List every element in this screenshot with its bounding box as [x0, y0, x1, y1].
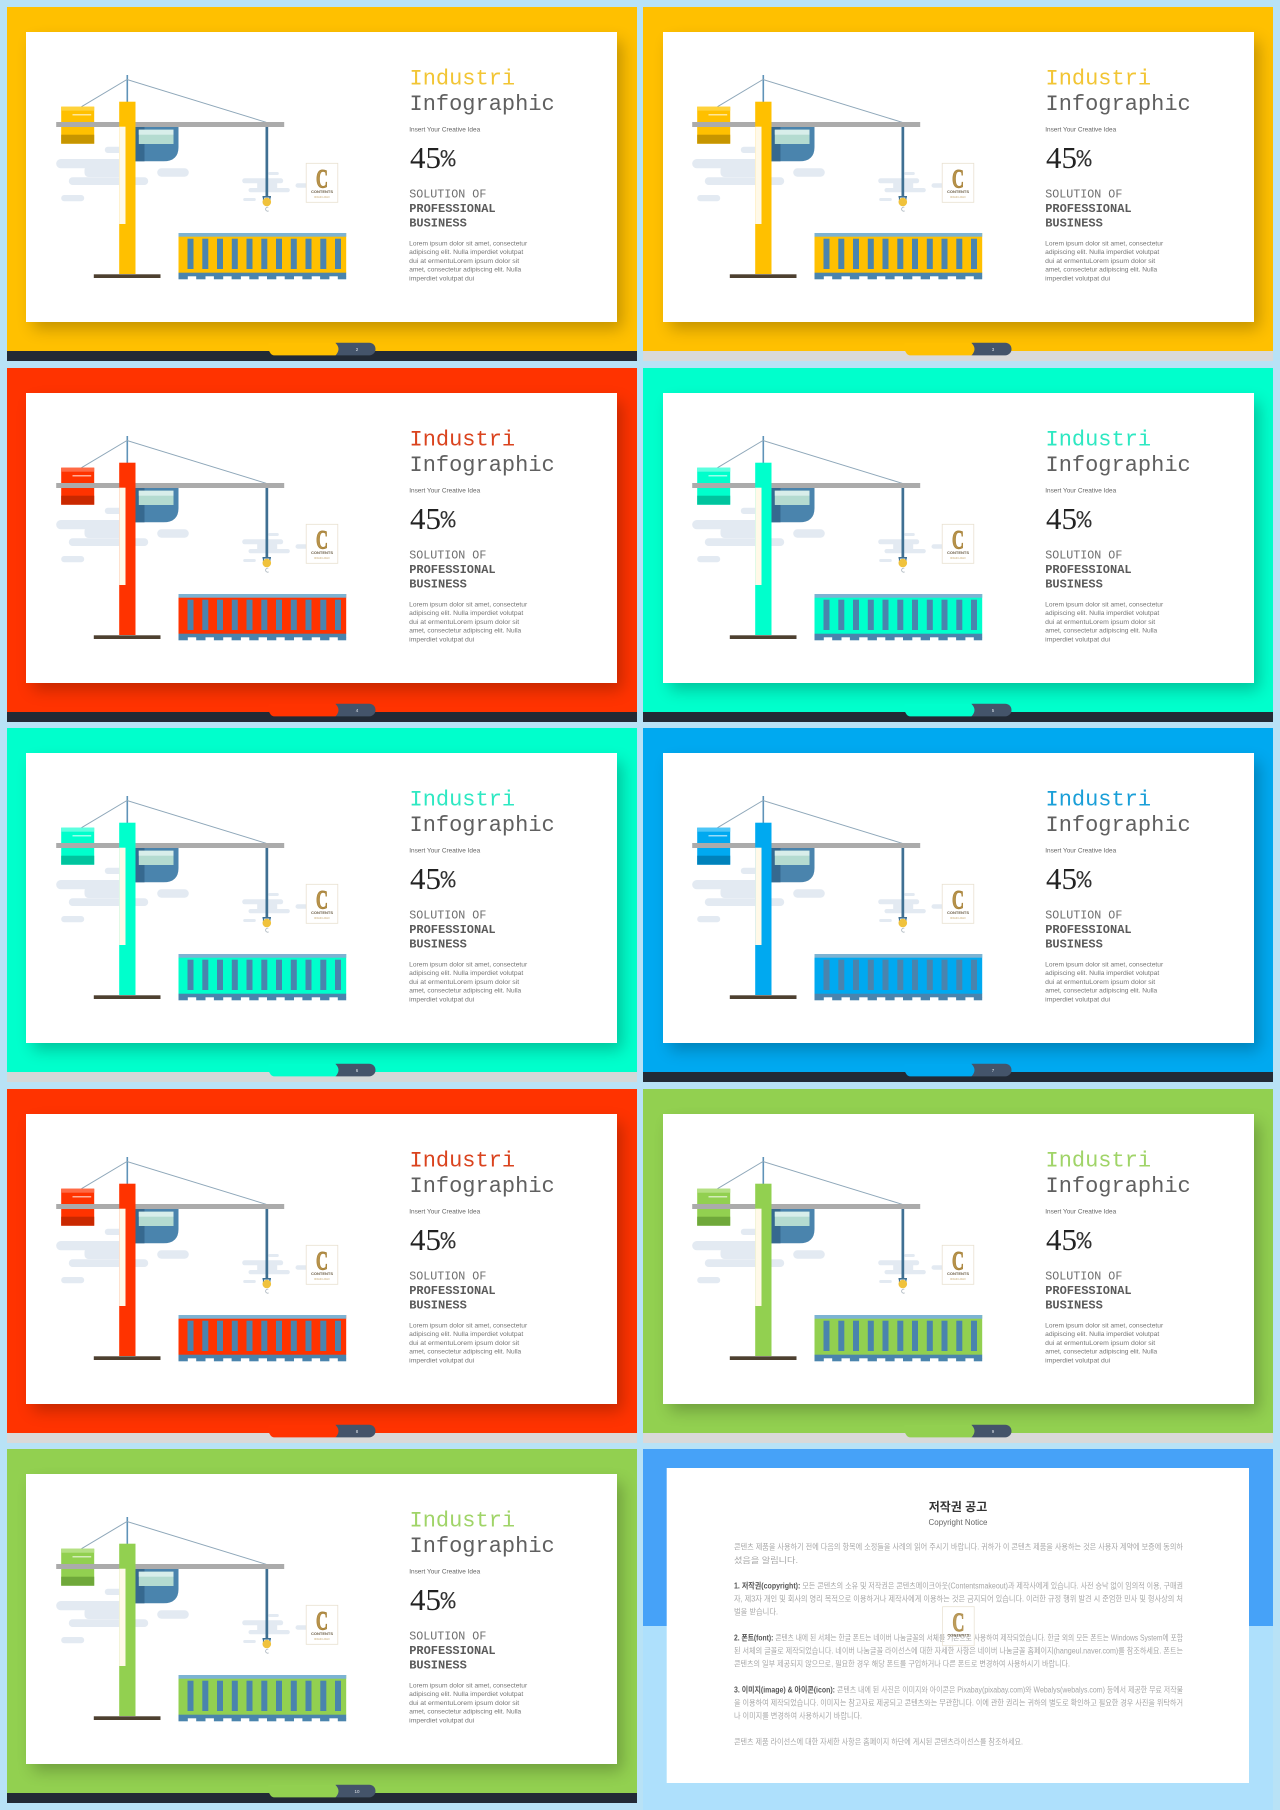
shipping container: [814, 954, 982, 1000]
logo watermark: [306, 1605, 337, 1644]
blue header band: [643, 1449, 1273, 1626]
body text: amet, consectetur adipiscing elit. Nulla: [409, 627, 521, 634]
notice section 1: 1. 저작권(copyright): 모든 콘텐츠의 소유 및 저작권은 콘텐츠메이크아웃(Contentsmakeout)과 제작사에게 있습니다. 사전 승낙 없이 임의적 이용, 구매권: [734, 1581, 1183, 1591]
notice section 3: 을 이용하여 제작되었습니다. 이미지는 참고자료 제공되고 콘텐츠와는 무관합니다. 이에 관한 권리는 귀하의 별도로 확인하고 필요한 경우 사진을 위탁하거: [734, 1697, 1183, 1707]
heading: PROFESSIONAL: [409, 562, 495, 576]
body text: Lorem ipsum dolor sit amet, consectetur: [409, 240, 527, 248]
subtitle: Insert Your Creative Idea: [1045, 1208, 1117, 1215]
title: Industri: [409, 1508, 515, 1533]
body text: [409, 962, 527, 1004]
subtitle: Insert Your Creative Idea: [409, 1568, 480, 1576]
clouds: [692, 1228, 948, 1283]
heading: BUSINESS: [1045, 217, 1103, 231]
body text: amet, consectetur adipiscing elit. Nulla: [409, 988, 521, 994]
heading: SOLUTION OF: [409, 1630, 486, 1644]
title: Infographic: [1046, 452, 1191, 478]
title: Infographic: [1046, 1174, 1191, 1198]
footer bar: [6, 1432, 636, 1442]
clouds: [56, 868, 312, 922]
heading: [409, 1269, 495, 1312]
footer bar: [643, 712, 1273, 722]
heading: SOLUTION OF: [409, 548, 486, 562]
logo watermark: C: [952, 164, 964, 194]
body text: [1045, 601, 1164, 643]
crane illustration: [692, 1156, 920, 1360]
heading: SOLUTION OF: [409, 188, 486, 202]
statistic 45%: 45: [410, 1222, 440, 1256]
heading: PROFESSIONAL: [409, 923, 495, 937]
logo watermark: CONTENTS: [310, 910, 333, 915]
heading: PROFESSIONAL: [409, 202, 495, 216]
logo watermark: C: [316, 1246, 328, 1275]
white card: [662, 32, 1254, 322]
white card: [26, 1114, 617, 1404]
body text: Lorem ipsum dolor sit amet, consectetur: [1045, 1322, 1164, 1329]
white card: [26, 392, 617, 682]
title: Industri: [1046, 427, 1151, 452]
heading: BUSINESS: [409, 1298, 466, 1312]
logo watermark: [942, 524, 974, 563]
heading: [1045, 188, 1132, 231]
logo watermark: CONTENTS: [947, 1270, 969, 1276]
notice background: [643, 1449, 1273, 1810]
body text: dui at ermentuLorem ipsum dolor sit: [409, 1340, 519, 1346]
footer bar: [643, 1072, 1273, 1082]
crane illustration: [56, 1517, 284, 1720]
statistic 45%: [410, 140, 456, 175]
body text: amet, consectetur adipiscing elit. Nulla: [409, 1348, 521, 1355]
statistic 45%: 45: [410, 500, 440, 536]
statistic 45%: %: [1076, 866, 1092, 896]
logo watermark: ROAD LOGO: [314, 917, 329, 920]
white card: [662, 392, 1254, 682]
statistic 45%: [410, 861, 456, 896]
logo watermark: ROAD LOGO: [950, 1278, 966, 1280]
body text: amet, consectetur adipiscing elit. Nulla: [1045, 627, 1158, 634]
body text: amet, consectetur adipiscing elit. Nulla: [1045, 266, 1158, 274]
logo watermark: CONTENTS: [947, 910, 969, 915]
heading: BUSINESS: [409, 577, 466, 591]
body text: imperdiet volutpat dui: [1045, 276, 1111, 282]
panel: slide 8 red: [6, 1088, 636, 1442]
logo watermark: [942, 1245, 974, 1284]
crane illustration: [692, 75, 920, 278]
clouds: [56, 507, 312, 562]
logo watermark: [942, 163, 974, 202]
body text: Lorem ipsum dolor sit amet, consectetur: [409, 1682, 527, 1690]
statistic 45%: 45: [1046, 1222, 1077, 1256]
shipping container: [178, 233, 346, 279]
title: [409, 66, 554, 117]
crane illustration: [56, 1156, 284, 1360]
body text: dui at ermentuLorem ipsum dolor sit: [409, 979, 519, 986]
subtitle: Insert Your Creative Idea: [409, 126, 480, 134]
page tab: [904, 1064, 1012, 1076]
title: Infographic: [1046, 813, 1191, 838]
body text: dui at ermentuLorem ipsum dolor sit: [1045, 1340, 1155, 1346]
logo watermark: ROAD LOGO: [314, 556, 329, 560]
title: Infographic: [409, 1174, 554, 1198]
footer bar: [643, 1432, 1273, 1442]
logo watermark: CONTENTS: [310, 1270, 333, 1276]
panel: slide 2 yellow: [6, 7, 636, 361]
body text: amet, consectetur adipiscing elit. Nulla: [1045, 1348, 1158, 1355]
body text: imperdiet volutpat dui: [1045, 636, 1111, 643]
slide artwork: [7, 66, 637, 361]
body text: adipiscing elit. Nulla imperdiet volutpat: [409, 610, 523, 616]
statistic 45%: %: [1076, 1227, 1092, 1256]
body text: Lorem ipsum dolor sit amet, consectetur: [1045, 240, 1164, 248]
heading: PROFESSIONAL: [409, 1644, 495, 1658]
title: [1046, 787, 1191, 838]
title: [1046, 1148, 1191, 1198]
body text: [409, 1682, 527, 1724]
page tab: 10: [354, 1789, 359, 1794]
panel: slide 7 blue: [643, 728, 1273, 1082]
shipping container: [178, 954, 346, 1000]
logo watermark: CONTENTS: [310, 1631, 333, 1636]
title: Industri: [1046, 787, 1151, 812]
body text: imperdiet volutpat dui: [409, 1718, 474, 1724]
notice section 3: [734, 1684, 1183, 1720]
slide artwork: [643, 1148, 1273, 1443]
statistic 45%: 45: [1046, 140, 1077, 175]
logo watermark: [306, 884, 337, 923]
body text: Lorem ipsum dolor sit amet, consectetur: [409, 962, 527, 968]
heading: SOLUTION OF: [409, 1269, 486, 1283]
footer bar: [6, 1793, 636, 1803]
body text: Lorem ipsum dolor sit amet, consectetur: [409, 601, 527, 608]
body text: adipiscing elit. Nulla imperdiet volutpat: [1045, 249, 1159, 256]
footer bar: [6, 712, 636, 722]
statistic 45%: [410, 1582, 456, 1617]
statistic 45%: [410, 500, 456, 536]
subtitle: Insert Your Creative Idea: [409, 487, 480, 494]
heading: [409, 548, 495, 591]
heading: PROFESSIONAL: [1045, 562, 1132, 576]
body text: dui at ermentuLorem ipsum dolor sit: [1045, 258, 1155, 265]
notice section 2: [734, 1633, 1184, 1668]
statistic 45%: [410, 1222, 456, 1256]
slide artwork: [7, 427, 637, 722]
body text: amet, consectetur adipiscing elit. Nulla: [409, 1708, 521, 1716]
clouds: [56, 147, 312, 201]
title: Industri: [409, 66, 515, 91]
heading: SOLUTION OF: [409, 909, 486, 923]
statistic 45%: [1046, 861, 1092, 896]
statistic 45%: 45: [1046, 500, 1077, 536]
page tab: [268, 1064, 375, 1076]
title: [409, 1508, 554, 1559]
body text: dui at ermentuLorem ipsum dolor sit: [1045, 979, 1155, 986]
statistic 45%: 45: [410, 861, 440, 896]
heading: SOLUTION OF: [1045, 909, 1122, 923]
logo watermark: ROAD LOGO: [950, 917, 966, 920]
logo watermark: C: [316, 525, 328, 554]
statistic 45%: 45: [1046, 861, 1077, 896]
logo watermark: ROAD LOGO: [314, 1638, 329, 1641]
logo watermark: [306, 163, 337, 202]
statistic 45%: %: [1076, 146, 1092, 174]
notice section 2: 된 서체의 글꼴로 제작되었습니다. 네이버 나눔글꼴 라이선스에 대한 자세한 사항은 네이버 나눔글꼴 홈페이지(hangeul.naver.com)를 참조하세요. 폰트는: [734, 1645, 1183, 1655]
panel: slide 10 green: [6, 1449, 636, 1803]
heading: BUSINESS: [1045, 577, 1103, 591]
statistic 45%: [1046, 500, 1092, 536]
logo watermark: C: [952, 1246, 964, 1275]
shipping container: [814, 233, 982, 279]
title: Industri: [409, 427, 515, 452]
page tab: 5: [992, 708, 995, 712]
footer bar: [643, 351, 1273, 361]
shipping container: [178, 1314, 346, 1361]
statistic 45%: %: [440, 1588, 456, 1616]
logo watermark: C: [952, 525, 964, 554]
page tab: [268, 703, 375, 716]
notice section 2: 2. 폰트(font): 콘텐츠 내에 된 서체는 한글 폰트는 네이버 나눔글꼴의 서체를 기본으로 사용하여 제작되었습니다. 한글 외의 모든 폰트는 Windows System에 포함: [734, 1633, 1184, 1643]
shipping container: [814, 1314, 982, 1361]
title: Infographic: [409, 452, 554, 478]
page tab: 3: [992, 347, 995, 352]
heading: PROFESSIONAL: [1045, 202, 1132, 216]
clouds: [692, 507, 948, 562]
panel: slide 6 teal: [6, 728, 636, 1082]
title: Industri: [1046, 1148, 1151, 1173]
logo watermark: CONTENTS: [947, 189, 969, 194]
notice intro: [734, 1542, 1184, 1565]
body text: [1045, 962, 1164, 1004]
statistic 45%: %: [440, 866, 456, 896]
shipping container: [178, 594, 346, 640]
crane illustration: [692, 796, 920, 999]
heading: [409, 188, 495, 231]
panel: slide 4 red: [6, 368, 636, 722]
statistic 45%: %: [440, 1227, 456, 1256]
body text: imperdiet volutpat dui: [409, 996, 474, 1004]
shipping container: [814, 594, 982, 640]
page tab: [904, 1424, 1012, 1437]
logo watermark: [306, 524, 337, 563]
notice intro: 콘텐츠 제품을 사용하기 전에 다음의 항목에 소정들을 사례의 읽어 주시기 바랍니다. 귀하가 이 콘텐츠 제품을 사용하는 것은 사용자 계약에 보증에 동의하: [734, 1542, 1184, 1552]
body text: Lorem ipsum dolor sit amet, consectetur: [1045, 601, 1164, 608]
body text: adipiscing elit. Nulla imperdiet volutpat: [1045, 970, 1159, 977]
white notice card: [667, 1468, 1249, 1783]
page tab: [268, 1785, 375, 1797]
notice subtitle: Copyright Notice: [928, 1518, 988, 1527]
title: Infographic: [409, 92, 554, 117]
white card: [26, 1474, 617, 1764]
heading: [409, 1630, 495, 1673]
notice section 2: 콘텐츠의 일부 제공되지 않으므로, 필요한 경우 해당 폰트를 구입하거나 다른 폰트로 변경하여 사용하시기 바랍니다.: [734, 1658, 1070, 1668]
crane illustration: [56, 75, 284, 278]
crane illustration: [56, 796, 284, 999]
subtitle: Insert Your Creative Idea: [1045, 126, 1117, 134]
logo watermark: [942, 884, 974, 923]
footer bar: [6, 351, 636, 361]
logo watermark: C: [316, 1606, 328, 1636]
heading: SOLUTION OF: [1045, 548, 1122, 562]
panel: slide 3 yellow: [643, 7, 1273, 361]
notice section 3: 3. 이미지(image) & 아이콘(icon): 콘텐츠 내에 된 사진은 이미지와 아이콘은 Pixabay(pixabay.com)와 Webalys(webalys.com) 등에서 제공한 무료 저작물: [734, 1684, 1183, 1694]
heading: [409, 909, 495, 952]
logo watermark: [306, 1245, 337, 1284]
subtitle: Insert Your Creative Idea: [1045, 848, 1117, 854]
title: Infographic: [409, 1534, 554, 1559]
body text: imperdiet volutpat dui: [409, 636, 474, 643]
body text: imperdiet volutpat dui: [409, 1357, 474, 1364]
body text: Lorem ipsum dolor sit amet, consectetur: [1045, 962, 1164, 968]
slide artwork: [7, 787, 637, 1082]
body text: adipiscing elit. Nulla imperdiet volutpat: [409, 1691, 523, 1698]
shipping container: [178, 1675, 346, 1721]
white card: [26, 753, 617, 1043]
heading: PROFESSIONAL: [1045, 1284, 1132, 1298]
title: Industri: [1046, 66, 1151, 91]
heading: SOLUTION OF: [1045, 1269, 1122, 1283]
white card: [26, 32, 617, 322]
title: [409, 427, 554, 478]
page tab: [268, 343, 375, 355]
body text: adipiscing elit. Nulla imperdiet volutpat: [409, 970, 523, 977]
heading: BUSINESS: [409, 217, 466, 231]
heading: BUSINESS: [1045, 1298, 1103, 1312]
body text: dui at ermentuLorem ipsum dolor sit: [1045, 618, 1155, 626]
clouds: [56, 1589, 312, 1643]
statistic 45%: %: [1076, 506, 1092, 535]
body text: imperdiet volutpat dui: [1045, 1357, 1111, 1364]
body text: dui at ermentuLorem ipsum dolor sit: [409, 1700, 519, 1707]
logo watermark: C: [952, 886, 964, 914]
statistic 45%: 45: [410, 1582, 440, 1617]
logo watermark: ROAD LOGO: [314, 196, 329, 199]
clouds: [56, 1228, 312, 1283]
statistic 45%: [1046, 140, 1092, 175]
logo watermark: ROAD LOGO: [314, 1278, 329, 1280]
page tab: 2: [355, 347, 358, 352]
body text: amet, consectetur adipiscing elit. Nulla: [409, 266, 521, 274]
heading: [1045, 1269, 1132, 1312]
body text: adipiscing elit. Nulla imperdiet volutpat: [409, 1330, 523, 1338]
heading: SOLUTION OF: [1045, 188, 1122, 202]
white card: [662, 1114, 1254, 1404]
notice section 1: 자, 제3자 개인 및 회사의 영리 목적으로 이용하거나 제작사에게 이용하는 것은 금지되어 있습니다. 이러한 규정 행위 발견 시 준엄한 민사 및 형사상의 처: [734, 1594, 1183, 1604]
heading: BUSINESS: [409, 1659, 466, 1673]
logo watermark: CONTENTS: [947, 550, 969, 554]
body text: [409, 1322, 527, 1364]
notice section 1: 벌을 받습니다.: [734, 1607, 778, 1617]
logo watermark: C: [316, 164, 328, 194]
heading: BUSINESS: [409, 938, 466, 952]
body text: adipiscing elit. Nulla imperdiet volutpat: [1045, 1330, 1159, 1338]
body text: imperdiet volutpat dui: [409, 276, 474, 282]
footer bar: [6, 1072, 636, 1082]
logo watermark: ROAD LOGO: [950, 556, 966, 560]
slide artwork: [7, 1508, 637, 1803]
logo watermark: [943, 1607, 974, 1646]
white card: [662, 753, 1254, 1043]
logo watermark: C: [952, 1608, 964, 1637]
slide artwork: [643, 66, 1273, 361]
slide artwork: [643, 787, 1273, 1082]
notice intro: 셨음을 알립니다.: [734, 1555, 798, 1565]
page tab: 7: [992, 1068, 995, 1073]
heading: [1045, 548, 1132, 591]
heading: [1045, 909, 1132, 952]
title: Infographic: [1046, 92, 1191, 117]
notice section 3: 나 이미지를 변경하여 사용하시기 바랍니다.: [734, 1710, 862, 1720]
statistic 45%: 45: [410, 140, 440, 175]
page tab: 8: [355, 1428, 358, 1434]
panel: slide 9 green: [643, 1088, 1273, 1442]
title: Infographic: [409, 813, 554, 838]
page tab: [904, 703, 1012, 716]
subtitle: Insert Your Creative Idea: [1045, 487, 1117, 494]
clouds: [692, 868, 948, 922]
logo watermark: ROAD LOGO: [950, 196, 966, 199]
notice title: 저작권 공고: [929, 1499, 987, 1514]
statistic 45%: %: [440, 146, 456, 174]
title: Industri: [409, 1148, 515, 1173]
logo watermark: CONTENTS: [310, 550, 333, 554]
heading: PROFESSIONAL: [1045, 923, 1132, 937]
body text: adipiscing elit. Nulla imperdiet volutpat: [1045, 610, 1159, 616]
slide artwork: [7, 1148, 637, 1443]
title: [409, 787, 554, 838]
body text: imperdiet volutpat dui: [1045, 996, 1111, 1004]
body text: [1045, 240, 1164, 282]
page tab: [904, 343, 1012, 355]
heading: BUSINESS: [1045, 938, 1103, 952]
notice footer text: 콘텐츠 제품 라이선스에 대한 자세한 사항은 홈페이지 하단에 게시된 콘텐츠라이선스를 참조하세요.: [734, 1737, 1023, 1747]
body text: Lorem ipsum dolor sit amet, consectetur: [409, 1322, 527, 1329]
subtitle: Insert Your Creative Idea: [409, 1208, 480, 1215]
crane illustration: [692, 436, 920, 638]
statistic 45%: [1046, 1222, 1092, 1256]
title: [409, 1148, 554, 1198]
body text: [409, 601, 527, 643]
body text: dui at ermentuLorem ipsum dolor sit: [409, 258, 519, 265]
page tab: [268, 1424, 375, 1437]
panel: slide 5 teal: [643, 368, 1273, 722]
notice section 1: [734, 1581, 1183, 1617]
body text: [409, 240, 527, 282]
body text: adipiscing elit. Nulla imperdiet volutpat: [409, 249, 523, 256]
slide artwork: [643, 427, 1273, 722]
statistic 45%: %: [440, 506, 456, 535]
heading: PROFESSIONAL: [409, 1284, 495, 1298]
page tab: 9: [992, 1428, 995, 1434]
logo watermark: CONTENTS: [310, 189, 333, 194]
body text: dui at ermentuLorem ipsum dolor sit: [409, 618, 519, 626]
title: [1046, 66, 1191, 117]
page tab: 4: [355, 708, 358, 712]
logo watermark: CONTENTS: [947, 1632, 970, 1638]
title: Industri: [409, 787, 515, 812]
body text: [1045, 1322, 1164, 1364]
logo watermark: C: [316, 886, 328, 914]
title: [1046, 427, 1191, 478]
page tab: 6: [355, 1068, 358, 1073]
body text: amet, consectetur adipiscing elit. Nulla: [1045, 988, 1158, 994]
subtitle: Insert Your Creative Idea: [409, 848, 480, 854]
crane illustration: [56, 436, 284, 638]
clouds: [692, 147, 948, 201]
